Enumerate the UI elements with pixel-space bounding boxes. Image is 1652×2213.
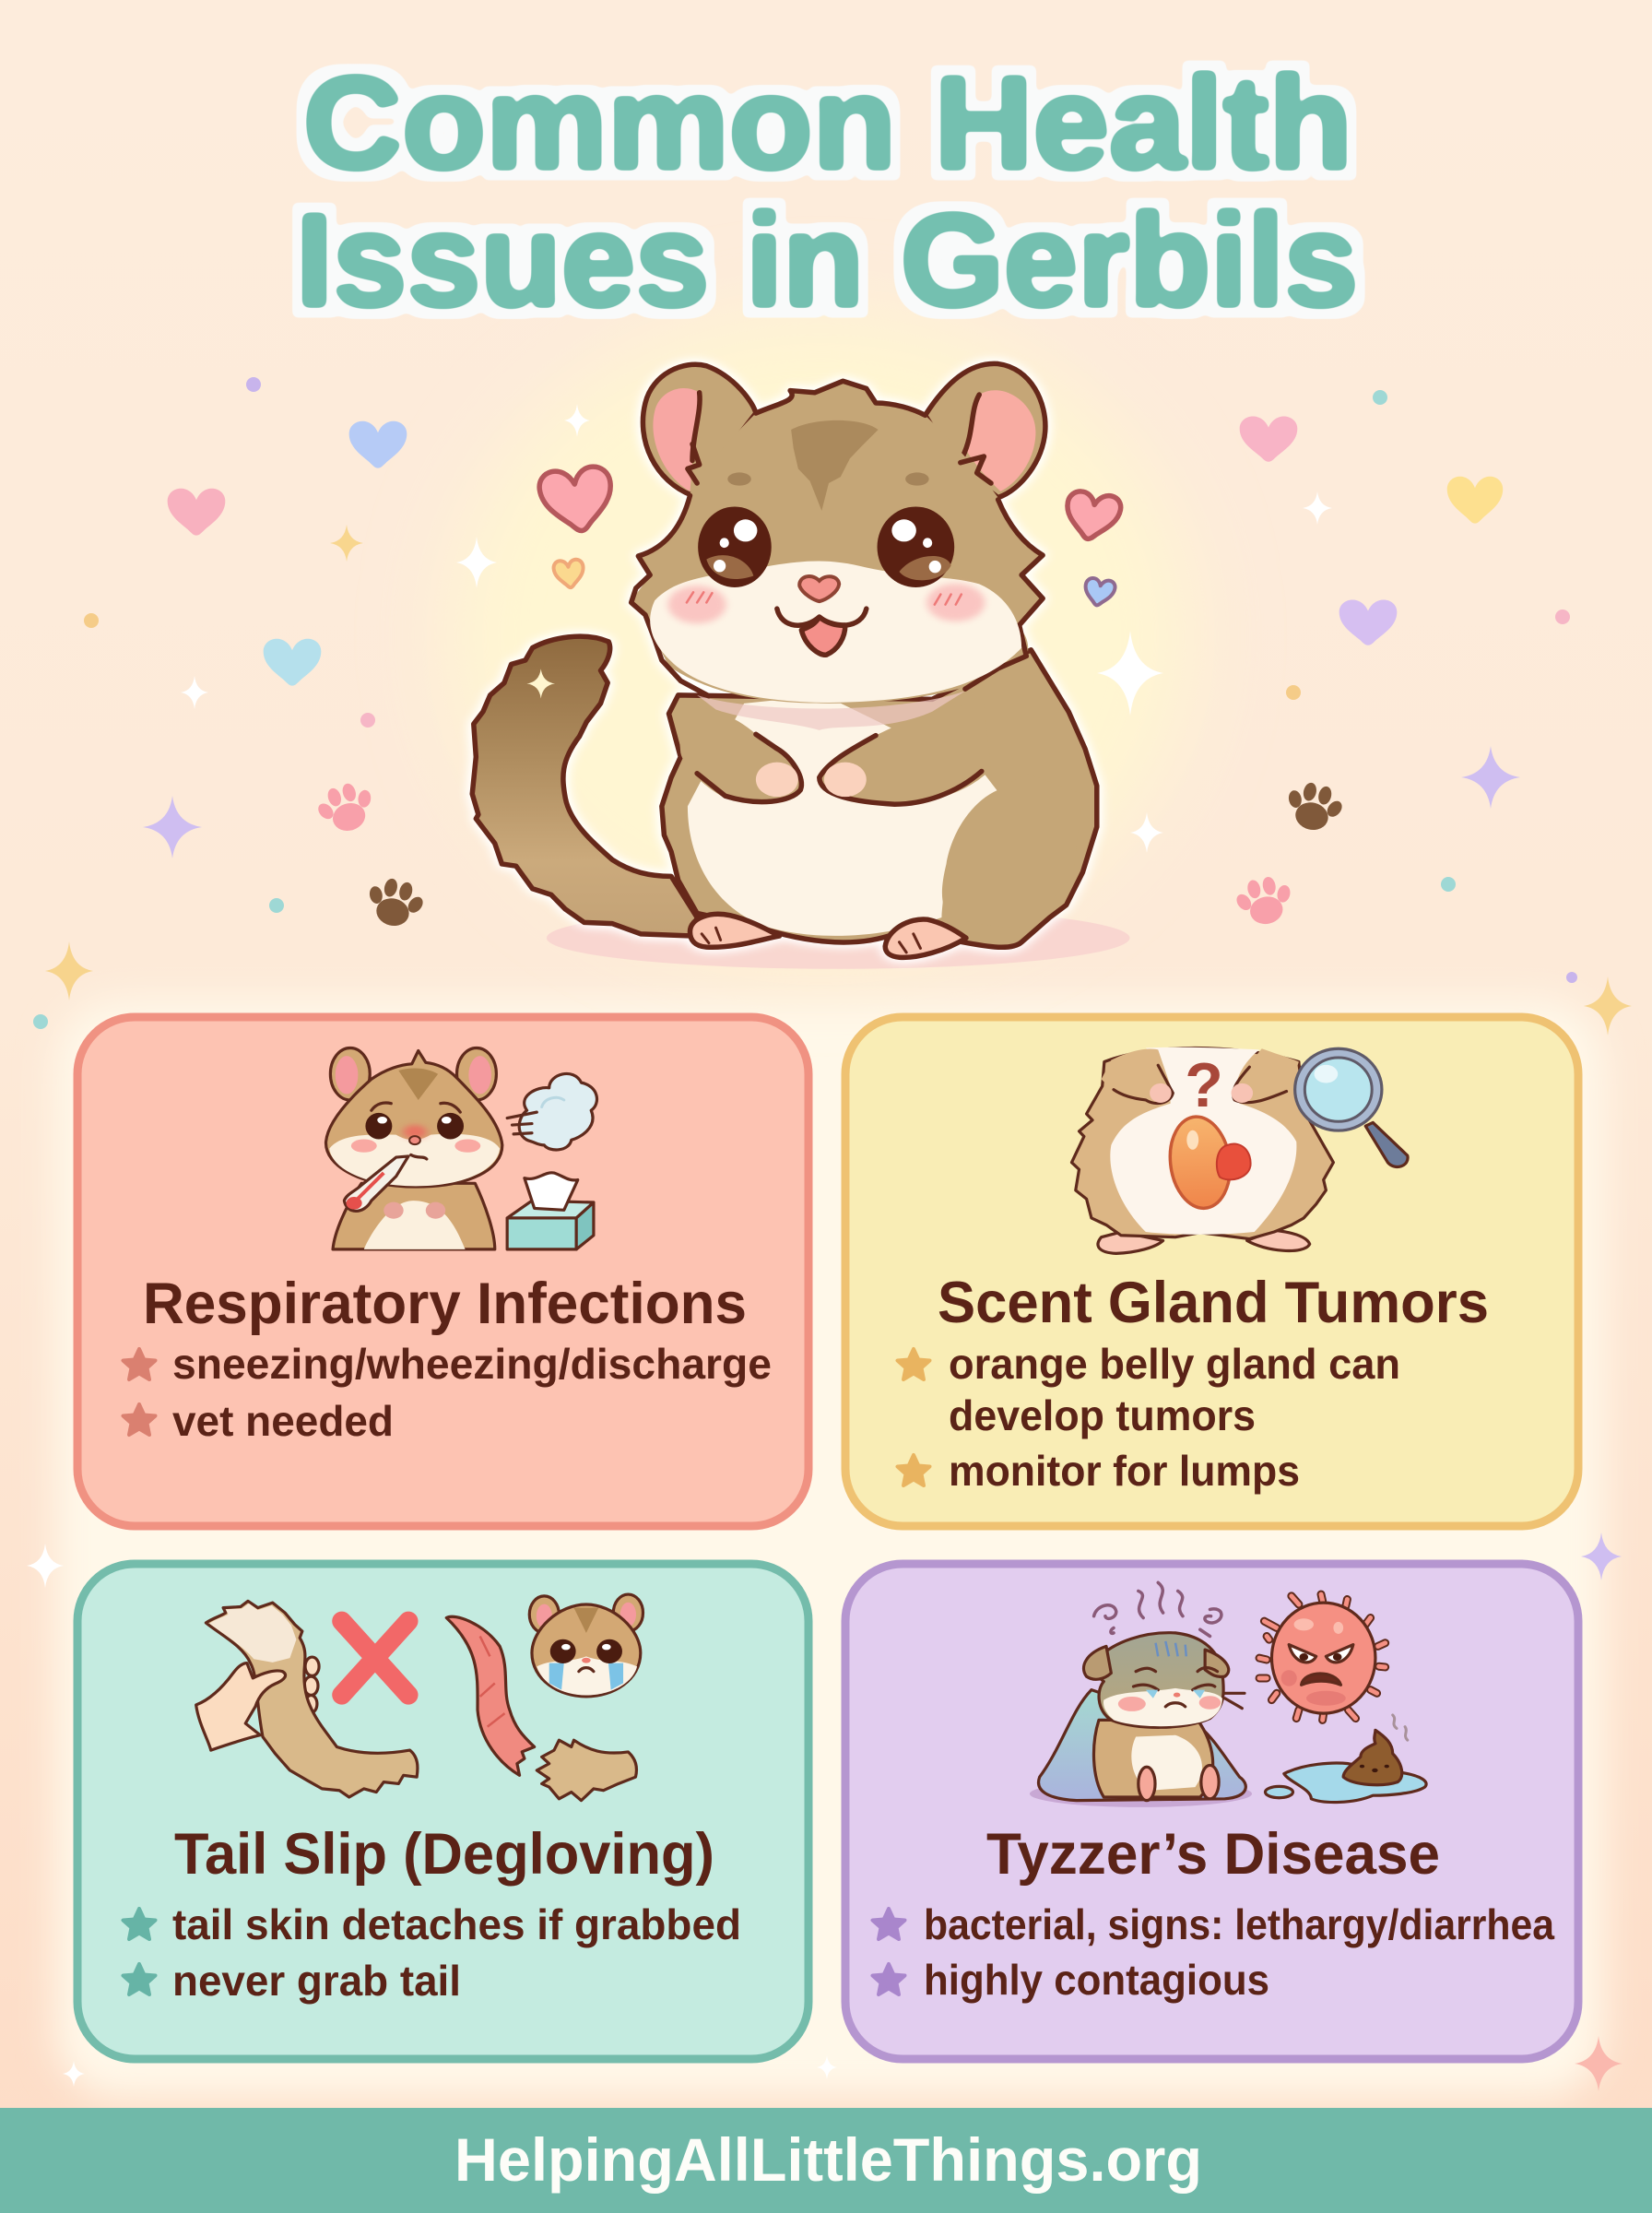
tufts near ears — [688, 444, 991, 483]
title: Issues in Gerbils — [296, 187, 1358, 334]
panel: scent gland tumors — [845, 1017, 1578, 1526]
blush marks — [687, 592, 962, 605]
right arm — [820, 704, 991, 804]
panel: tail slip — [77, 1564, 808, 2059]
forehead stripe — [791, 420, 879, 511]
icon: gerbil belly with gland and magnifying glass — [1071, 1047, 1408, 1253]
blush — [667, 584, 985, 623]
bullet list: monitor for lumps — [949, 1447, 1300, 1495]
big heart left — [537, 465, 618, 535]
brows — [727, 472, 929, 486]
footer website text: HelpingAllLittleThings.org — [454, 2125, 1202, 2194]
icon: sick hamster with thermometer, cloud and tissue box — [326, 1047, 597, 1249]
panel: respiratory infections — [77, 1017, 808, 1526]
bullet list: never grab tail — [172, 1957, 461, 2005]
panel: tyzzer's disease — [845, 1564, 1578, 2059]
right eye — [878, 506, 954, 587]
bullet list: develop tumors — [949, 1391, 1256, 1439]
ground shadow — [547, 907, 1130, 969]
left ear — [643, 364, 756, 495]
left eye — [698, 506, 772, 587]
belly — [688, 695, 998, 936]
hero gerbil illustration — [472, 363, 1130, 969]
chest shadow — [697, 691, 965, 730]
bullet list: sneezing/wheezing/discharge — [172, 1340, 772, 1388]
bullet list — [124, 1340, 772, 1445]
big heart right — [1061, 490, 1123, 543]
heading: Scent Gland Tumors — [938, 1271, 1489, 1335]
bullet list: vet needed — [172, 1397, 394, 1445]
bullet list: highly contagious — [924, 1956, 1269, 2004]
gerbil figure — [472, 363, 1097, 957]
bullet list: orange belly gland can — [949, 1340, 1400, 1388]
hand patches — [756, 763, 867, 797]
heading: Tail Slip (Degloving) — [174, 1822, 714, 1887]
title — [296, 50, 1358, 334]
bullet list: tail skin detaches if grabbed — [172, 1900, 741, 1948]
title: Common Health — [303, 50, 1352, 196]
small heart blue — [1082, 577, 1116, 608]
bullet list — [872, 1900, 1554, 2004]
nose and mouth — [777, 576, 867, 655]
right ear — [926, 363, 1045, 498]
bullet list — [898, 1340, 1400, 1495]
left arm — [677, 705, 801, 802]
head fill — [631, 380, 1043, 704]
tail — [472, 636, 697, 936]
head outline — [631, 381, 1043, 696]
small heart yellow — [553, 559, 585, 589]
heading: Tyzzer’s Disease — [986, 1822, 1440, 1887]
bullet list — [124, 1900, 741, 2005]
bullet list: bacterial, signs: lethargy/diarrhea — [924, 1900, 1554, 1948]
footer banner — [0, 2108, 1652, 2213]
heading: Respiratory Infections — [143, 1272, 747, 1336]
decorative hearts, paws, dots and sparkles — [27, 377, 1632, 2091]
icon: sick gerbil, germ, puddle and droppings — [1030, 1582, 1426, 1807]
tail sparkle — [526, 669, 555, 698]
haunch — [942, 774, 1082, 928]
feet — [690, 914, 966, 957]
icon: grabbed tail, cross, exposed tail, crying gerbil — [196, 1594, 643, 1801]
body — [662, 650, 1097, 947]
face cream — [650, 562, 1021, 703]
icon: question mark: ? — [1185, 1050, 1223, 1120]
